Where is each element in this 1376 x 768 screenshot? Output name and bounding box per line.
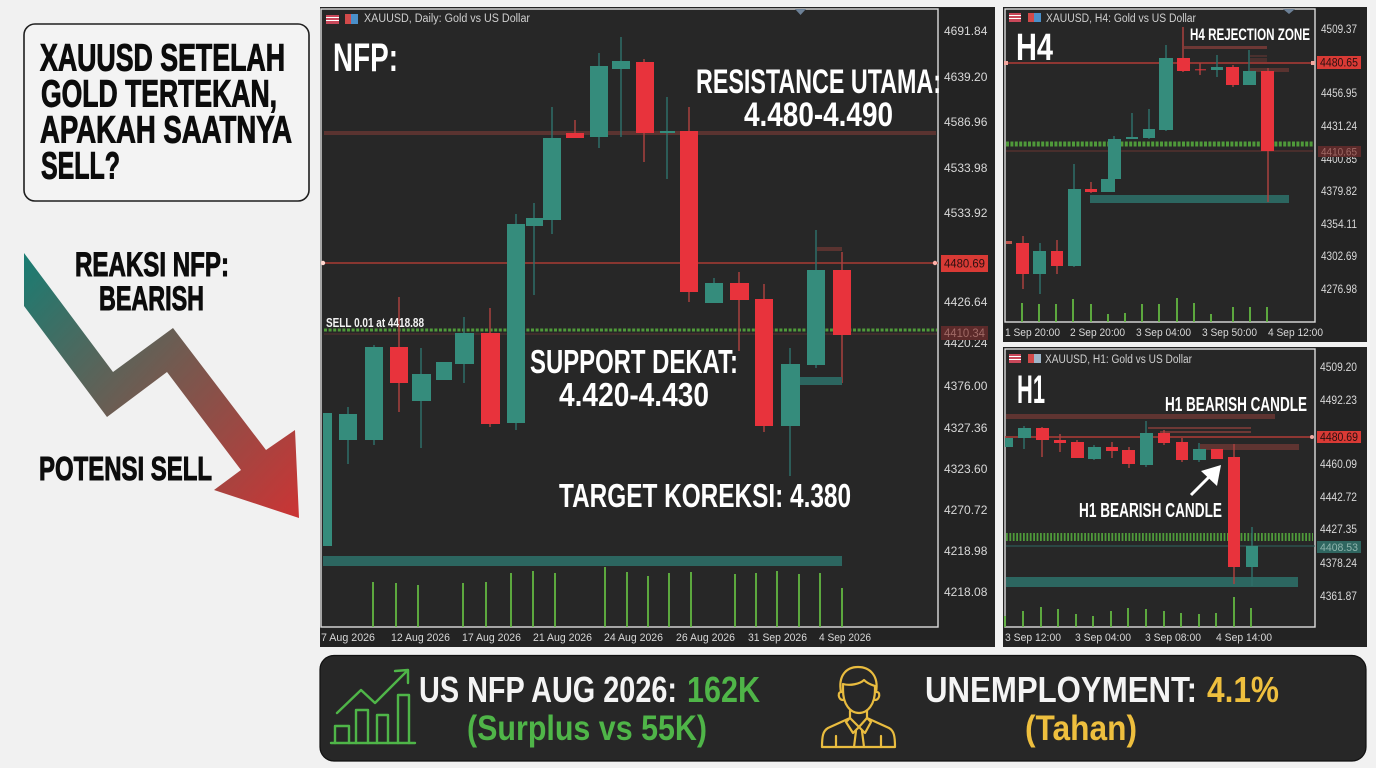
title box: APAKAH SAATNYA [40,110,292,152]
date axis: H4: 2 Sep 20:00 [1070,327,1125,339]
chart header: H4 [1009,9,1295,25]
title box [24,24,309,201]
resistance zones: H1 [1006,414,1299,450]
price axis: daily: 4533.98 [944,161,988,175]
price axis: daily: 4327.36 [944,421,988,435]
label: support dekat: SUPPORT DEKAT: [530,343,738,380]
price axis: H1: 4509.20 [1320,360,1357,374]
level lines: H1 [1005,435,1315,546]
volume bars: H1 [1005,597,1251,627]
price axis: daily: 4533.92 [944,206,988,220]
price axis: daily: 4586.96 [944,115,988,129]
icon: growth chart [331,670,415,743]
date axis: daily: 4 Sep 2026 [819,632,871,644]
label: H4 rejection zone: H4 REJECTION ZONE [1190,25,1310,44]
arrow: bearish zigzag [24,253,299,518]
price axis: H4: 4410.65 [1321,146,1357,158]
chart header: daily [326,9,806,25]
price axis: daily: 4218.98 [944,544,988,558]
candlesticks: H1 [1005,421,1258,586]
panel: bottom data bar [320,656,1366,761]
label: reaksi NFP bearish: BEARISH [99,280,204,318]
label: support dekat: 4.420-4.430 [559,376,709,413]
panel: H1 chart [1003,347,1367,647]
date axis: H4: 3 Sep 50:00 [1202,327,1257,339]
text: unemployment: 4.1% [1207,669,1279,710]
label: resistance utama: RESISTANCE UTAMA: [696,63,941,101]
price axis: daily: 4480.69 [944,258,985,270]
level lines: H4 [1004,61,1315,244]
price axis: H4: 4431.24 [1321,119,1357,133]
price axis: H1: 4378.24 [1320,556,1357,570]
title box: SELL? [41,146,120,188]
support zone bar: H4 [1090,195,1289,203]
support dotted line [324,330,937,334]
rejection zone bars: H4 [1184,46,1289,72]
label: sell order: SELL 0.01 at 4418.88 [326,315,424,330]
date axis: H4: 4 Sep 12:00 [1268,327,1323,339]
label: resistance utama: 4.480-4.490 [744,96,893,134]
price axis: H1: 4480.69 [1320,432,1358,444]
panel: H4 chart [1003,7,1367,342]
price axis: daily: 4691.84 [944,24,988,38]
label: reaksi NFP bearish [75,246,229,318]
price axis: daily: 4218.08 [944,585,988,599]
label: potensi sell: POTENSI SELL [39,450,212,487]
price axis: H4: 4354.11 [1321,217,1357,231]
text: unemployment: UNEMPLOYMENT: [925,669,1197,710]
price axis: daily: 4426.64 [944,295,988,309]
date axis: H1: 3 Sep 12:00 [1005,632,1061,644]
price axis: H4: 4302.69 [1321,249,1357,263]
label: resistance utama [696,63,941,134]
chart header: H4: XAUUSD, H4: Gold vs US Dollar [1046,13,1196,25]
date axis: H1: 3 Sep 04:00 [1075,632,1131,644]
price axis: H1: 4442.72 [1320,490,1357,504]
title box: XAUUSD SETELAH [40,38,285,80]
price axis: daily: 4410.34 [944,328,986,340]
resistance zone line [324,131,936,135]
price axis: H4 [1317,22,1361,296]
title box: GOLD TERTEKAN, [41,74,277,116]
volume bars: H4 [1022,298,1267,322]
price axis: daily: 4270.72 [944,503,988,517]
label: H1 bearish candle top: H1 BEARISH CANDLE [1165,394,1307,416]
text: US NFP [419,669,760,748]
text: unemployment [925,669,1279,748]
date axis: H1 [1005,632,1272,644]
text: US NFP: 162K [687,669,760,710]
volume bars: daily [373,567,842,627]
date axis: daily: 7 Aug 2026 [321,632,375,644]
date axis: daily: 24 Aug 2026 [604,632,663,644]
price axis: H4: 4480.65 [1320,58,1358,70]
chart header: H1: XAUUSD, H1: Gold vs US Dollar [1045,354,1192,366]
date axis: H1: 4 Sep 14:00 [1216,632,1272,644]
price axis: H1: 4492.23 [1320,393,1357,407]
price axis: H1 [1317,360,1361,603]
text: US NFP: US NFP AUG 2026: [419,669,677,710]
date axis: daily: 26 Aug 2026 [676,632,735,644]
icon: person in suit [822,667,895,747]
price axis: H1: 4460.09 [1320,457,1357,471]
price axis: H4: 4509.37 [1321,22,1357,36]
price axis: H1: 4427.35 [1320,522,1357,536]
date axis: daily: 31 Sep 2026 [748,632,807,644]
text: unemployment: (Tahan) [1025,709,1137,748]
price axis: H4: 4400.85 [1321,152,1357,166]
price axis: H4: 4276.98 [1321,282,1357,296]
date axis: H4 [1005,327,1323,339]
price axis: daily: 4323.60 [944,462,988,476]
arrow: to bearish candle [1191,465,1221,495]
label: reaksi NFP bearish: REAKSI NFP: [75,246,229,284]
candlesticks: H4 [1016,27,1274,294]
price axis: H4: 4379.82 [1321,184,1357,198]
date axis: daily: 12 Aug 2026 [391,632,450,644]
date axis: daily: 17 Aug 2026 [462,632,521,644]
date axis: daily [321,632,871,644]
chart header: daily: XAUUSD, Daily: Gold vs US Dollar [364,13,530,25]
label: H1 bearish candle lower: H1 BEARISH CANDLE [1079,500,1222,522]
price axis: daily: 4420.24 [944,336,988,350]
label: NFP: NFP: [333,36,398,80]
date axis: H1: 3 Sep 08:00 [1145,632,1201,644]
price axis: daily: 4639.20 [944,70,988,84]
label: target koreksi: TARGET KOREKSI: 4.380 [559,477,851,514]
label: H1: H1 [1017,368,1045,412]
date axis: H4: 1 Sep 20:00 [1005,327,1060,339]
date axis: H4: 3 Sep 04:00 [1136,327,1191,339]
price axis: daily: 4376.00 [944,379,988,393]
text: US NFP: (Surplus vs 55K) [467,709,707,748]
support zone bar: H1 [1006,577,1298,587]
price axis: daily [941,24,988,599]
target zone bar [323,556,842,566]
date axis: daily: 21 Aug 2026 [533,632,592,644]
current price line [321,261,938,265]
candlesticks: daily [323,37,851,546]
price axis: H4: 4456.95 [1321,86,1357,100]
panel: daily chart [320,7,995,647]
label: H4: H4 [1016,27,1053,69]
label: support dekat [530,343,738,413]
price axis: H1: 4361.87 [1320,589,1357,603]
price axis: H1: 4408.53 [1320,542,1358,554]
